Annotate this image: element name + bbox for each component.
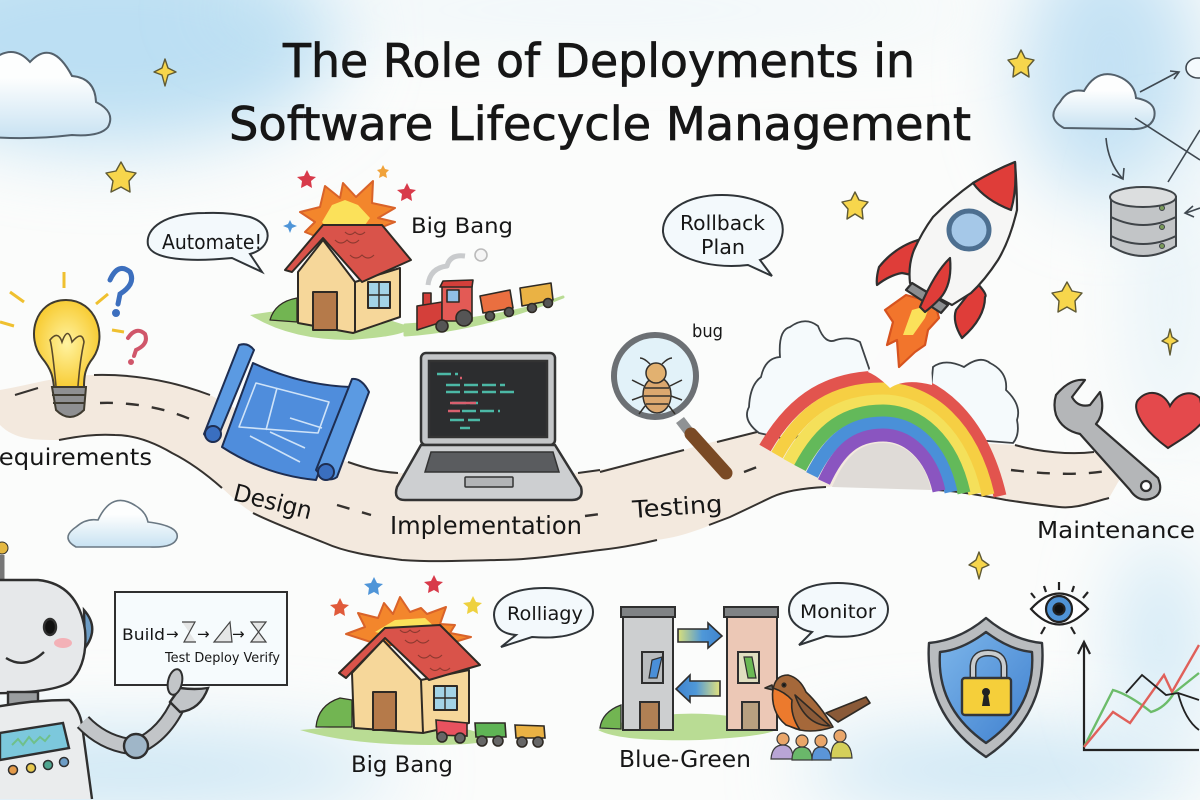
label: maintenance: Maintenance: [1037, 518, 1195, 544]
label: design: Design: [231, 479, 315, 525]
icon: shield with lock: [929, 618, 1043, 757]
label: bug: bug: [692, 321, 723, 342]
sign: build test deploy verify: Test Deploy Verify: [164, 650, 280, 666]
label: big bang top: Big Bang: [411, 214, 513, 238]
icon: cloud top left: [0, 52, 110, 138]
arrow: right: [678, 623, 722, 648]
speech bubble: rollback plan: [663, 195, 783, 276]
robot: [0, 542, 208, 799]
rocket plume: [868, 330, 932, 388]
icon: lightbulb: [0, 272, 124, 417]
label: implementation: Implementation: [390, 511, 582, 540]
icon: cloud top right: [1053, 74, 1155, 129]
title: The Role of Deployments in: [282, 34, 915, 88]
icon: wrench: [1054, 380, 1160, 500]
speech bubble: rollback plan: Plan: [701, 235, 745, 259]
label: testing: Testing: [630, 490, 723, 524]
label: blue-green: Blue-Green: [619, 747, 751, 773]
icon: blue-green towers: [598, 607, 778, 740]
icon: eye: [1031, 582, 1088, 634]
icon: smoke clouds: [747, 321, 1018, 443]
icon: rocket with flame: [877, 162, 1017, 367]
icon: database: [1110, 187, 1176, 256]
sign: build test deploy verify: Build: [122, 625, 165, 644]
arrow: left: [676, 675, 720, 702]
sign: build test deploy verify: →: [232, 625, 245, 643]
icon: laptop: [396, 353, 582, 500]
icon: toy train bottom: [436, 720, 545, 747]
speech bubble: automate: Automate!: [162, 230, 262, 254]
road: [0, 375, 1125, 561]
icon: magnifier with bug: [614, 335, 726, 473]
icon: robin bird: [765, 675, 870, 731]
title: [229, 34, 971, 151]
icon: heart: [1136, 393, 1200, 448]
speech bubble: rollingy: Rolliagy: [507, 603, 583, 625]
chart: line graph: [1078, 642, 1199, 750]
title: Software Lifecycle Management: [229, 97, 971, 151]
icon: house with explosion top: [250, 181, 411, 340]
speech bubble: rollingy: [494, 588, 593, 647]
network diagram top right: [1106, 58, 1200, 217]
icon: house with explosion bottom: [300, 597, 488, 745]
sign: build test deploy verify: [115, 592, 287, 685]
icon: rainbow: [765, 377, 1000, 496]
icon: group of people: [771, 730, 852, 760]
sign: build test deploy verify: →: [166, 625, 179, 643]
icon: sparks bottom: [330, 575, 482, 616]
icon: toy train top: [405, 249, 563, 335]
speech bubble: monitor: Monitor: [800, 601, 876, 623]
sign: build test deploy verify: →: [197, 625, 210, 643]
icon: sparks top: [283, 165, 416, 233]
icon: blueprint: [204, 344, 369, 480]
label: big bang bottom: Big Bang: [351, 753, 453, 778]
stars: [106, 50, 1178, 579]
icon: cloud left middle: [68, 500, 177, 547]
speech bubble: automate: [148, 213, 268, 272]
robot thumb: [165, 668, 185, 696]
icon: question marks: [110, 268, 146, 364]
speech bubble: monitor: [789, 583, 888, 645]
speech bubble: rollback plan: Rollback: [680, 211, 765, 235]
